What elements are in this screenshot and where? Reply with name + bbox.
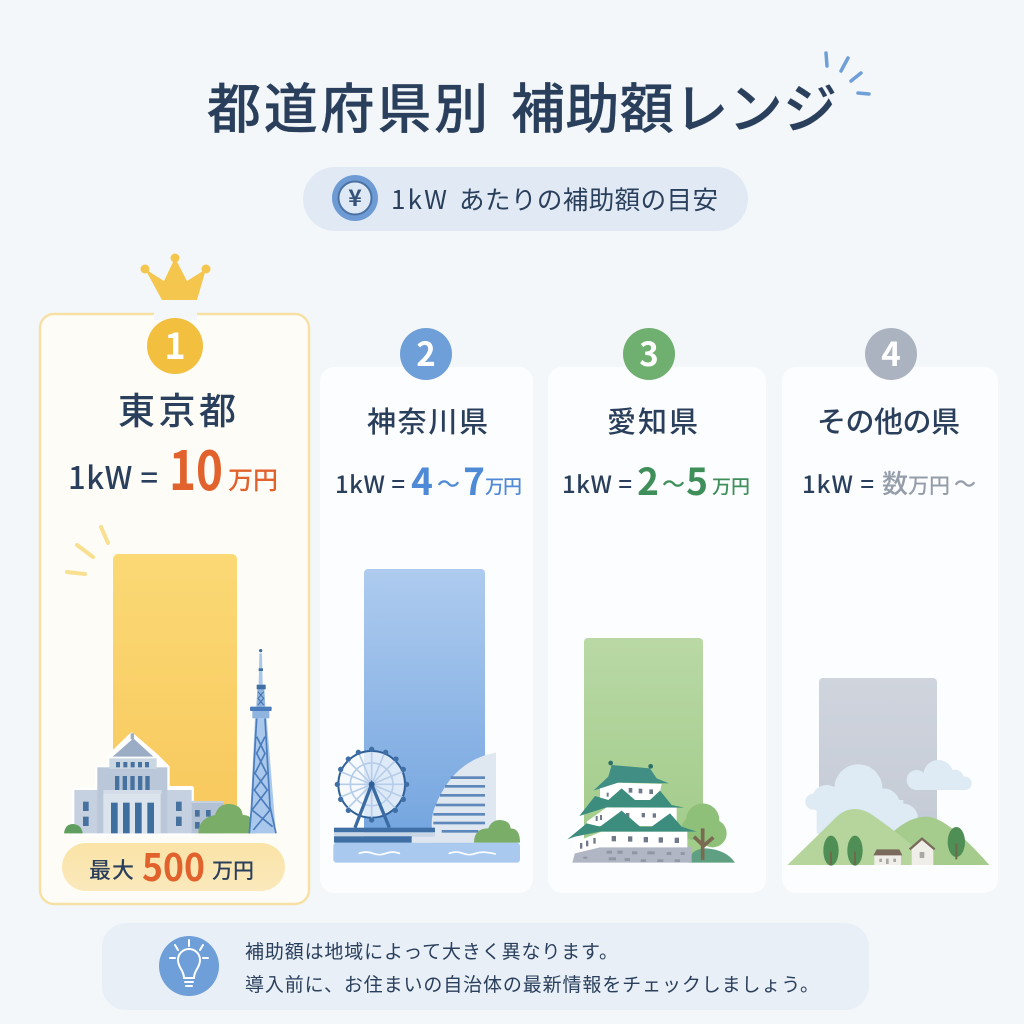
rank badge 3 xyxy=(623,328,675,380)
rate: 1kW = 2-5 man-yen xyxy=(562,452,750,506)
rate: 1kW = 2-5 man-yen: 2 xyxy=(637,452,659,506)
rate: 1kW = 4-7 man-yen: 〜 xyxy=(437,465,460,499)
rank badge 4 xyxy=(865,328,917,380)
bar xyxy=(113,554,237,809)
icon: light bulb xyxy=(159,936,219,996)
rate: 1kW = 4-7 man-yen: 万円 xyxy=(485,472,522,499)
rank badge 3: 3 xyxy=(639,328,659,376)
card xyxy=(320,367,533,893)
bar xyxy=(584,638,703,860)
max amount pill: 万円 xyxy=(212,855,254,885)
subtitle text: 1kW xyxy=(391,180,447,217)
icon: yen coin xyxy=(332,175,378,221)
max amount pill xyxy=(62,837,285,892)
icon: yen coin: ¥ xyxy=(348,179,362,213)
card xyxy=(548,367,766,893)
rate: 1kW = several man-yen: 1kW = xyxy=(802,465,874,500)
panel: rank 2 Kanagawa xyxy=(320,328,533,893)
card xyxy=(782,367,998,893)
title xyxy=(207,65,837,144)
subtitle pill xyxy=(303,167,748,231)
title: 都道府県別 xyxy=(207,65,488,144)
panel: rank 3 Aichi xyxy=(548,328,766,893)
rank badge 1: 1 xyxy=(164,318,186,370)
bar xyxy=(364,569,485,838)
rank badge 2 xyxy=(400,328,452,380)
illustration: Yokohama waterfront xyxy=(333,747,520,863)
rate: 1kW = several man-yen: 〜 xyxy=(954,467,976,499)
border gap behind badge xyxy=(154,308,197,320)
card xyxy=(40,314,309,904)
prefecture name: Tokyo: 東京都 xyxy=(118,381,236,435)
illustration: Nagoya castle xyxy=(567,761,735,863)
rate: 1kW = 2-5 man-yen: 1kW = xyxy=(562,465,632,500)
illustration: Diet building and tower xyxy=(64,649,276,833)
subtitle text: あたりの補助額の目安 xyxy=(459,180,718,217)
rank badge 2: 2 xyxy=(416,328,436,376)
panel: rank 4 other prefectures xyxy=(782,328,998,893)
max amount pill: 500 xyxy=(142,837,205,892)
rate: 1kW = several man-yen: 数 xyxy=(882,464,908,501)
sparkle rays xyxy=(67,527,108,574)
rate: 1kW = 4-7 man-yen: 4 xyxy=(411,452,433,506)
rate: 1kW = 4-7 man-yen: 1kW = xyxy=(335,465,405,500)
prefecture name: Kanagawa: 神奈川県 xyxy=(367,399,488,441)
panel: rank 1 Tokyo xyxy=(40,254,309,904)
note text: 補助額は地域によって大きく異なります。 xyxy=(245,937,618,964)
rate: 1kW = 2-5 man-yen: 〜 xyxy=(662,465,685,499)
rate: 1kW = several man-yen xyxy=(802,464,976,501)
rate: 1kW = 4-7 man-yen xyxy=(335,452,522,506)
rate: 1kW = 2-5 man-yen: 5 xyxy=(686,452,708,506)
rate: 1kW = 10 man-yen: 万円 xyxy=(228,461,278,497)
rate: 1kW = 10 man-yen: 10 xyxy=(169,427,223,506)
rate: 1kW = 4-7 man-yen: 7 xyxy=(463,452,485,506)
sparkle rays near title xyxy=(826,53,869,94)
prefecture name: others: その他の県 xyxy=(817,399,960,441)
illustration: countryside xyxy=(787,760,989,866)
icon: crown xyxy=(140,254,210,300)
rank badge 1 xyxy=(147,318,203,374)
rank badge 4: 4 xyxy=(881,328,901,376)
max amount pill: 最大 xyxy=(89,853,134,885)
note text: 導入前に、お住まいの自治体の最新情報をチェックしましょう。 xyxy=(245,970,819,997)
bar xyxy=(819,678,937,852)
callout: note xyxy=(102,923,869,1010)
rate: 1kW = 2-5 man-yen: 万円 xyxy=(712,472,750,499)
note text xyxy=(245,937,819,997)
rate: 1kW = 10 man-yen: 1kW = xyxy=(68,453,158,498)
rate: 1kW = several man-yen: 万円 xyxy=(908,470,950,500)
rate: 1kW = 10 man-yen xyxy=(68,427,278,506)
prefecture name: Aichi: 愛知県 xyxy=(607,399,698,441)
title: 補助額レンジ xyxy=(511,65,837,144)
